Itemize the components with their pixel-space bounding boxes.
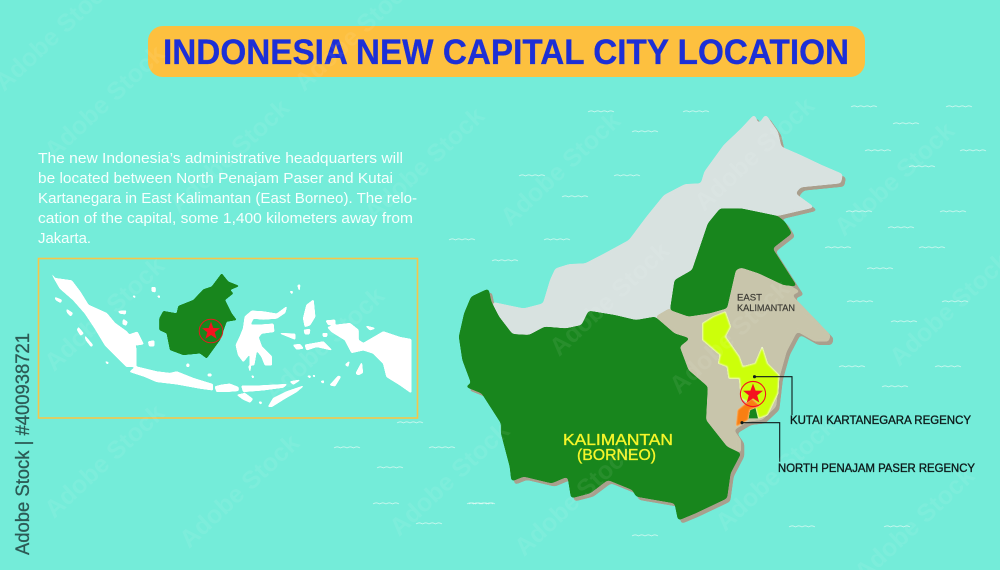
text block: description: The new Indonesia’s administrative headquarters will (38, 150, 403, 167)
stock credit: Adobe Stock | #400938721 (12, 333, 34, 555)
region: East Kalimantan (tan) (655, 268, 831, 453)
title banner (148, 26, 865, 77)
icon: capital star marker (740, 381, 766, 407)
watermarks: Adobe Stock (359, 102, 490, 226)
text block: description: Jakarta. (38, 230, 91, 247)
leader line: Kutai Kartanegara (754, 376, 792, 415)
region: North Penajam Paser (orange) (736, 398, 760, 427)
watermarks: Adobe Stock (39, 40, 170, 164)
label: Kutai Kartanegara Regency: KUTAI KARTANEGARA REGENCY (790, 413, 971, 427)
region: Kutai Kartanegara (yellow-green) (703, 312, 779, 418)
islands of Indonesia (52, 274, 411, 407)
label: Kalimantan (Borneo): (BORNEO) (577, 447, 656, 464)
watermarks: Adobe Stock (689, 92, 820, 216)
text block: description: Kartanegara in East Kalimantan (East Borneo). The relo- (38, 190, 417, 207)
watermarks: Adobe Stock (384, 417, 515, 541)
watermarks: Adobe Stock (495, 107, 626, 231)
watermarks: Adobe Stock (710, 412, 841, 536)
title: INDONESIA NEW CAPITAL CITY LOCATION (163, 32, 849, 72)
text block: description: cation of the capital, some 1,400 kilometers away from (38, 210, 413, 227)
watermarks: Adobe Stock (164, 94, 295, 218)
sea waves (334, 106, 986, 536)
watermarks: Adobe Stock (664, 275, 795, 399)
leader line: North Penajam Paser (741, 422, 780, 462)
region: north Borneo (grey) (491, 114, 843, 335)
watermarks: Adobe Stock (829, 117, 960, 241)
watermarks: Adobe Stock (39, 252, 170, 376)
label: East Kalimantan: EAST (737, 292, 762, 302)
label: Kalimantan (Borneo) (563, 432, 673, 464)
watermarks: Adobe Stock (509, 437, 640, 561)
label: North Penajam Paser Regency: NORTH PENAJAM PASER REGENCY (778, 461, 975, 475)
watermarks: Adobe Stock (174, 429, 305, 553)
label: Kalimantan (Borneo): KALIMANTAN (563, 432, 673, 449)
panel: Borneo main map (459, 114, 846, 524)
label: East Kalimantan (737, 292, 795, 313)
watermarks: Adobe Stock (39, 399, 170, 523)
region: small green inlet (748, 407, 758, 418)
panel: Indonesia locator map (38, 258, 418, 418)
text block: description: be located between North Penajam Paser and Kutai (38, 170, 393, 187)
island: Kalimantan highlighted (159, 273, 239, 358)
watermarks: Adobe Stock (259, 282, 390, 406)
label: East Kalimantan: KALIMANTAN (737, 302, 795, 313)
region: Kalimantan west and south (green) (459, 288, 741, 521)
map shadow (462, 117, 846, 524)
region: North Kalimantan (green) (670, 208, 797, 317)
watermarks: Adobe Stock (544, 237, 675, 361)
text block: description (38, 150, 417, 247)
icon: capital star on locator map (199, 319, 223, 343)
